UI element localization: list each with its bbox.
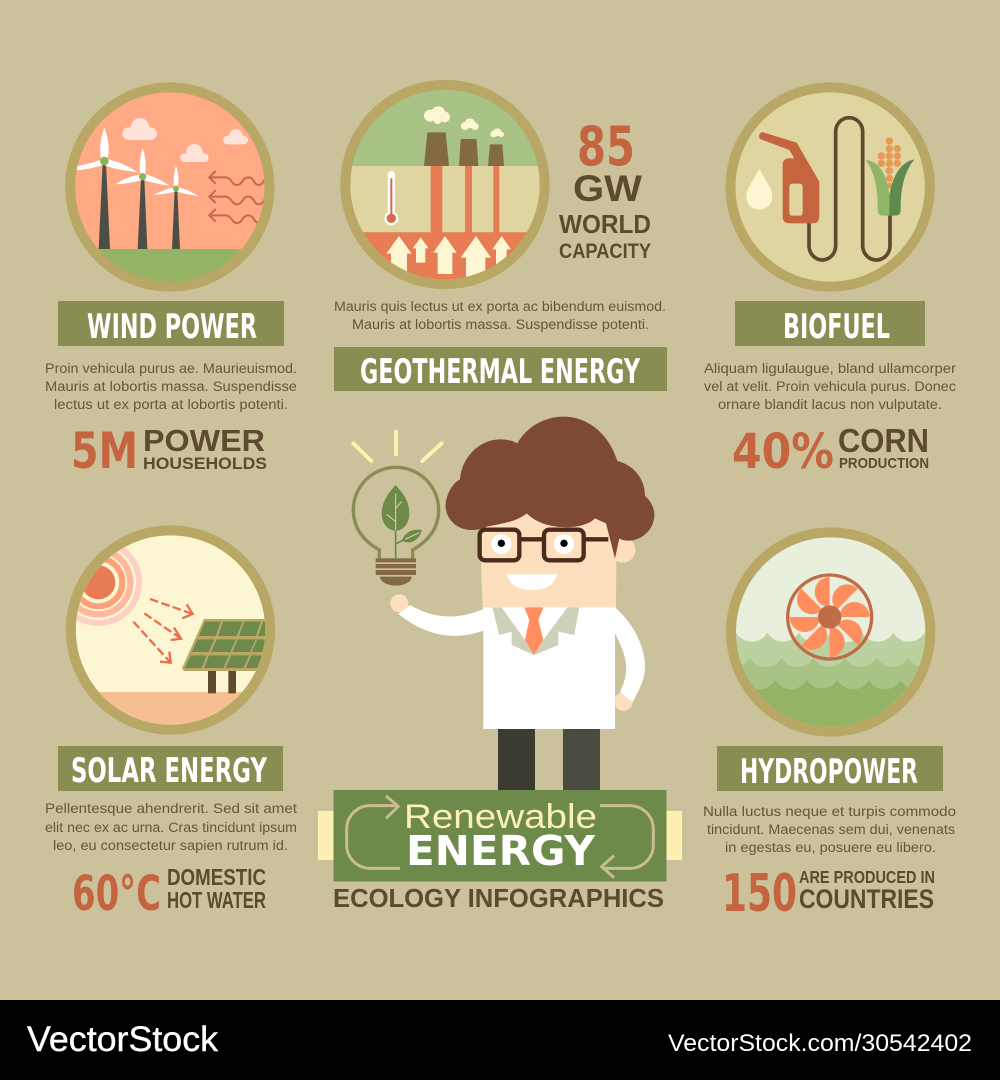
text block: solar energy (45, 801, 297, 853)
icon: solar energy circle (58, 525, 277, 735)
icon: biofuel circle (725, 82, 935, 292)
text block: wind power: lectus ut ex porta at lobortis potenti. (54, 397, 288, 412)
stat: 85 GW world capacity: CAPACITY (559, 240, 651, 263)
stat: 150 countries: ARE PRODUCED IN (799, 867, 935, 887)
stat: 5M power households (71, 422, 267, 480)
text block: geothermal energy: Mauris quis lectus ut ex porta ac bibendum euismod. (334, 299, 666, 314)
heading: solar energy (58, 746, 283, 791)
text block: wind power: Proin vehicula purus ae. Maurieuismod. (45, 361, 297, 376)
text block: hydropower (703, 804, 956, 855)
stat: 85 GW world capacity: WORLD (559, 209, 651, 239)
icon: hydropower circle (726, 527, 936, 737)
character: hands (390, 594, 633, 711)
icon: thermometer (384, 171, 398, 225)
icon: recycling arrows (347, 796, 653, 878)
stat: 5M power households: 5M (71, 422, 138, 480)
text block: hydropower: in egestas eu, posuere eu libero. (725, 840, 936, 855)
heading: geothermal energy: GEOTHERMAL ENERGY (360, 352, 640, 392)
stat: 60°C domestic hot water: 60°C (72, 866, 161, 922)
stat: 40% corn production: PRODUCTION (839, 456, 929, 472)
character: glasses (480, 530, 608, 560)
title banner: renewable energy: ENERGY (406, 827, 596, 875)
stat: 85 GW world capacity: GW (573, 168, 642, 209)
text block: geothermal energy (334, 299, 666, 332)
heading: wind power (58, 301, 284, 347)
footer watermark bar: VectorStock (27, 1020, 219, 1059)
stat: 85 GW world capacity (559, 115, 651, 263)
character: arms (398, 605, 645, 702)
text block: biofuel: vel at velit. Proin vehicula purus. Donec (704, 379, 956, 394)
footer watermark bar (0, 1000, 1000, 1080)
text block: solar energy: Pellentesque ahendrerit. Sed sit amet (45, 801, 297, 816)
text block: geothermal energy: Mauris at lobortis massa. Suspendisse potenti. (352, 317, 649, 332)
icon: geothermal circle (340, 80, 550, 289)
character: trouser legs (498, 729, 600, 791)
stat: 60°C domestic hot water (72, 864, 266, 922)
stat: 40% corn production: CORN (838, 422, 929, 459)
text block: biofuel: ornare blandit lacus non vulputate. (718, 397, 942, 412)
text block: wind power (45, 361, 297, 412)
stat: 5M power households: POWER (143, 423, 265, 458)
stat: 150 countries: 150 (722, 864, 797, 924)
heading: biofuel (735, 301, 925, 347)
text block: biofuel (704, 361, 957, 412)
stat: 150 countries: COUNTRIES (799, 884, 934, 914)
text block: biofuel: Aliquam ligulaugue, bland ullamcorper (704, 361, 957, 376)
heading: solar energy: SOLAR ENERGY (71, 751, 267, 791)
heading: hydropower (717, 746, 943, 792)
heading: biofuel: BIOFUEL (783, 307, 890, 347)
subtitle: ECOLOGY INFOGRAPHICS (333, 885, 664, 913)
stat: 60°C domestic hot water: DOMESTIC (167, 864, 266, 890)
stat: 40% corn production: 40% (732, 424, 834, 480)
stat: 5M power households: HOUSEHOLDS (143, 454, 267, 473)
icon: light bulb with plant (353, 432, 442, 586)
title banner: renewable energy: Renewable (404, 798, 597, 836)
stat: 85 GW world capacity: 85 (577, 115, 635, 178)
title banner: renewable energy (318, 790, 682, 882)
icon: water wheel (788, 575, 872, 659)
character: lab coat (483, 607, 615, 729)
text block: solar energy: elit nec ex ac urna. Cras tincidunt ipsum (45, 820, 297, 835)
icon: wind power circle (65, 82, 274, 292)
text block: hydropower: Nulla luctus neque et turpis commodo (703, 804, 956, 819)
stat: 150 countries (722, 864, 935, 924)
stat: 40% corn production (732, 422, 929, 480)
illustration: scientist with light bulb (353, 417, 654, 729)
text block: solar energy: leo, eu consectetur sapien rutrum id. (53, 838, 288, 853)
heading: geothermal energy (334, 347, 667, 392)
text block: wind power: Mauris at lobortis massa. Suspendisse (45, 379, 297, 394)
character: curly hair (446, 417, 654, 558)
footer watermark bar: VectorStock.com/30542402 (668, 1030, 972, 1057)
text block: hydropower: tincidunt. Maecenas sem dui, venenats (707, 822, 955, 837)
stat: 60°C domestic hot water: HOT WATER (167, 887, 266, 913)
character: face (479, 510, 635, 608)
heading: wind power: WIND POWER (87, 307, 257, 347)
